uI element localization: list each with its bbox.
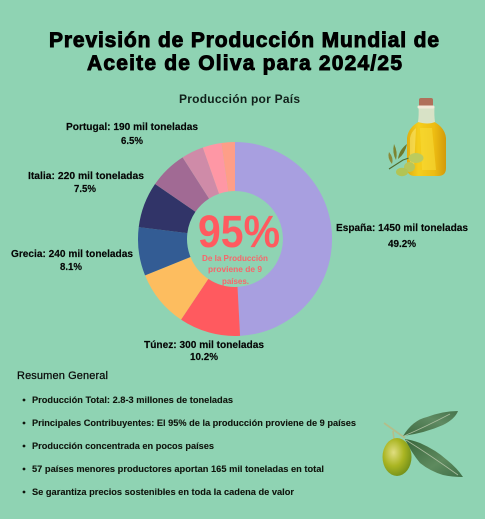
label: España: España: 1450 mil toneladas <box>336 223 468 234</box>
slice: yellow <box>145 257 208 320</box>
center callout: proviene de 9 <box>208 264 262 274</box>
center callout: De la Producción <box>202 253 268 263</box>
bullet: concentrated: Producción concentrada en pocos países <box>32 441 214 452</box>
center callout: países. <box>222 276 249 286</box>
slice: Portugal <box>155 157 209 212</box>
label: Portugal <box>66 122 198 147</box>
chart heading: Producción por País <box>179 92 300 106</box>
slice: Túnez <box>181 279 240 336</box>
title <box>49 29 439 75</box>
summary heading: Resumen General <box>17 370 108 382</box>
center callout: 95% <box>198 206 280 257</box>
label: Italia: 7.5% <box>74 184 96 195</box>
label: Túnez: Túnez: 300 mil toneladas <box>144 340 264 351</box>
slice: pink <box>183 148 219 199</box>
label: España <box>336 223 468 250</box>
slice: España <box>235 142 332 336</box>
bullet: contributors: Principales Contribuyentes: El 95% de la producción proviene de 9 países <box>32 418 356 429</box>
slice: orange <box>222 142 235 191</box>
label: Grecia: 8.1% <box>60 262 82 273</box>
title: Previsión de Producción Mundial de <box>49 29 439 52</box>
label: Grecia <box>11 249 133 273</box>
slice: light pink <box>203 143 228 194</box>
label: Grecia: Grecia: 240 mil toneladas <box>11 249 133 260</box>
slice: Grecia <box>138 227 190 275</box>
label: Portugal: 6.5% <box>121 136 143 147</box>
slice: Italia <box>139 184 195 233</box>
icon: olive oil bottle <box>388 98 446 176</box>
label: Portugal: Portugal: 190 mil toneladas <box>66 122 198 133</box>
bullet: prices: Se garantiza precios sostenibles en toda la cadena de valor <box>32 487 294 498</box>
bullet: minor producers: 57 países menores productores aportan 165 mil toneladas en total <box>32 464 324 475</box>
label: España: 49.2% <box>388 239 416 250</box>
label: Italia: Italia: 220 mil toneladas <box>28 171 144 182</box>
label: Túnez <box>144 340 264 363</box>
center callout <box>198 206 280 286</box>
label: Túnez: 10.2% <box>190 352 218 363</box>
icon: olive branch <box>382 411 463 477</box>
donut chart <box>138 142 332 336</box>
title: Aceite de Oliva para 2024/25 <box>87 52 402 75</box>
summary list <box>23 395 356 498</box>
bullet: total: Producción Total: 2.8-3 millones de toneladas <box>32 395 233 406</box>
label: Italia <box>28 171 144 195</box>
